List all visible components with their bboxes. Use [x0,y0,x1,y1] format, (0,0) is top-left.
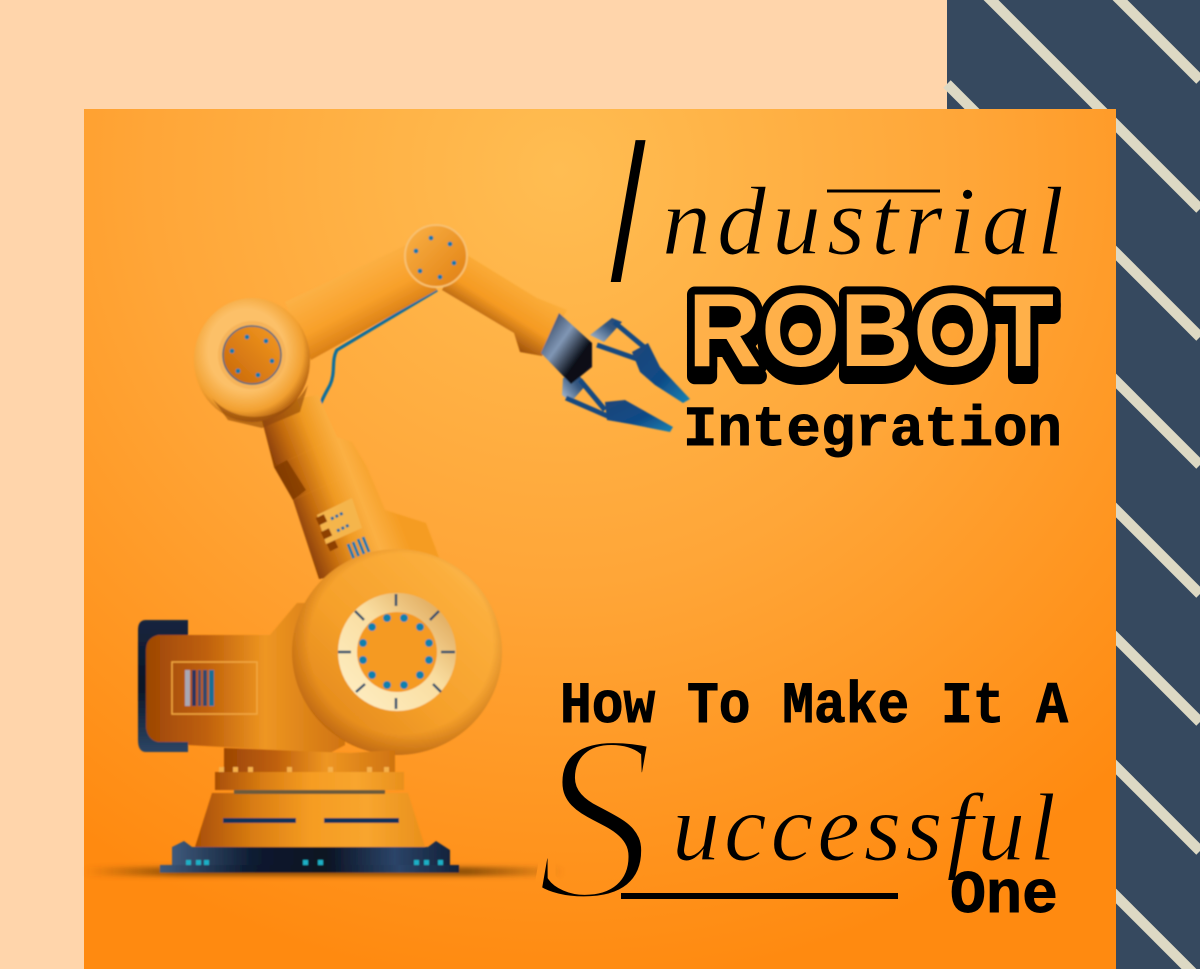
gripper [541,313,690,432]
title: ROBOT: ROBOT [688,273,1054,389]
title: Industrial: I [584,79,673,339]
underline [621,893,898,899]
shoulder joint [194,298,310,428]
orange card [84,109,1116,969]
main disc [138,549,502,755]
subtitle: How To Make It A: How To Make It A [560,675,1068,740]
barcode [185,670,214,706]
floor shadow [84,867,564,876]
robot arm illustration [84,225,690,876]
navy striped panel [947,0,1200,969]
label plate [172,662,257,714]
forearm [442,252,567,356]
lower arm [258,395,440,579]
lower finger [562,372,673,432]
elbow joint [405,225,467,287]
peach background [0,0,947,969]
upper arm [285,245,437,360]
upper finger [590,318,690,403]
subtitle: Successful: S [535,684,655,950]
end cap [138,620,188,752]
subtitle: Successful: uccessful [672,774,1060,881]
title: Integration: Integration [683,399,1062,463]
subtitle: One: One [950,863,1058,931]
base [160,748,459,872]
cable [318,290,437,441]
title: Industrial [584,79,1070,339]
title: Industrial: ndustrial [662,168,1070,276]
control panel [316,498,369,559]
